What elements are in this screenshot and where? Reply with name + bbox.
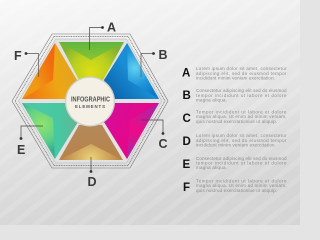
callout C: [141, 120, 168, 151]
legend item C: magna aliqua. Ut enim ad minim veniam,: [196, 114, 286, 119]
callout C: C: [158, 137, 168, 151]
legend item B: Consectetur adipiscing elit sed do eiusmod: [196, 88, 287, 93]
legend item A: incididunt minim veniam exercitation.: [196, 76, 275, 80]
callout A: [90, 20, 116, 50]
callout D: [88, 157, 97, 189]
legend item B: tempor incididunt ut labore et dolore: [196, 93, 287, 98]
segment A: green: [59, 42, 124, 80]
legend item E: magna aliqua.: [196, 165, 227, 170]
callout E: E: [17, 143, 25, 157]
legend item D: incididunt minim veniam exercitation.: [196, 142, 276, 148]
legend item F: F: [183, 182, 190, 194]
legend item F: [183, 178, 287, 194]
legend item B: magna aliqua.: [196, 98, 227, 102]
callout E: [17, 126, 43, 157]
legend item D: Lorem ipsum dolor sit amet, consectetur: [196, 133, 287, 138]
legend item A: [182, 66, 287, 80]
callout D: D: [88, 175, 97, 189]
callout A: A: [107, 20, 116, 34]
legend item A: Lorem ipsum dolor sit amet, consectetur: [196, 66, 287, 71]
segment B: blue: [104, 43, 159, 99]
legend item D: [182, 133, 287, 148]
legend item E: E: [182, 159, 190, 171]
callout B: B: [158, 48, 168, 62]
callout B: [141, 48, 168, 77]
legend item A: A: [182, 68, 190, 80]
legend item D: adipiscing elit, sed do eiusmod tempor: [196, 138, 287, 143]
legend item E: Consectetur adipiscing elit sed do eiusmod: [196, 156, 287, 161]
legend item C: C: [182, 113, 191, 125]
callout F: F: [14, 49, 22, 63]
legend item E: tempor incididunt ut labore et dolore: [196, 161, 287, 166]
segment D: tan: [59, 125, 123, 160]
legend item A: adipiscing elit, sed do eiusmod tempor: [196, 71, 287, 76]
center circle: ELEMENTS: [75, 104, 105, 109]
legend item C: quis nostrud exercitationiue ut aliquip.: [196, 119, 277, 124]
callout F: [14, 49, 38, 77]
legend item F: magna aliqua. Ut enim ad minim veniam,: [196, 183, 286, 188]
segment C: magenta: [104, 103, 159, 159]
hexagon frame: [12, 34, 168, 168]
center circle: INFOGRAPHIC: [71, 96, 110, 104]
legend item D: D: [182, 136, 191, 148]
legend item B: B: [182, 90, 191, 102]
legend item B: [182, 88, 287, 102]
segment F: orange: [22, 43, 77, 99]
center circle: [65, 76, 115, 126]
segment E: teal green: [22, 103, 78, 159]
legend item C: [182, 110, 287, 125]
legend item E: [182, 156, 287, 171]
legend item F: Tempor incididunt ut labore et dolore: [196, 178, 287, 184]
legend item C: Tempor incididunt ut labore et dolore: [196, 110, 287, 114]
legend item F: quis nostrud exercitationiue ut aliquip.: [196, 188, 277, 193]
